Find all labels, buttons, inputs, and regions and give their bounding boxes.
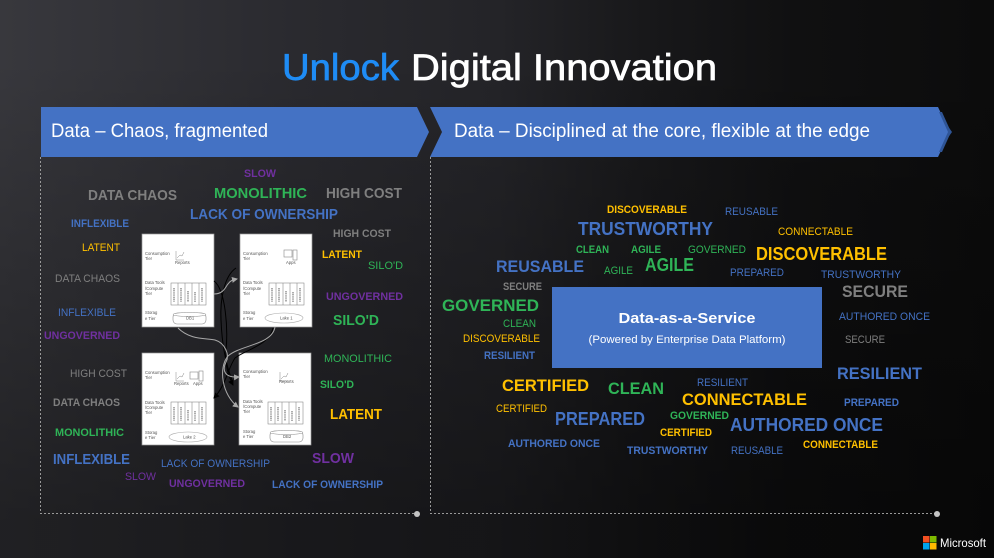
word cloud: disciplined attributes: REUSABLE [496, 257, 584, 276]
card: vertical D: DB2 [283, 434, 292, 439]
word cloud: disciplined attributes: PREPARED [730, 267, 784, 279]
card: vertical B: e Tier [243, 316, 254, 321]
word cloud: disciplined attributes: AUTHORED ONCE [508, 438, 600, 450]
word cloud: chaos attributes: MONOLITHIC [55, 427, 124, 439]
card: vertical A: Tier [145, 291, 153, 296]
word cloud: chaos attributes: INFLEXIBLE [53, 451, 130, 468]
word cloud: chaos attributes: INFLEXIBLE [71, 218, 129, 230]
word cloud: disciplined attributes: TRUSTWORTHY [627, 445, 709, 457]
arrow header: chaos [41, 107, 429, 157]
card: vertical B: Storag [243, 310, 256, 315]
card: vertical A: Tier [145, 256, 153, 261]
word cloud: disciplined attributes: AGILE [645, 255, 694, 275]
word cloud: chaos attributes: MONOLITHIC [324, 353, 392, 365]
word cloud: disciplined attributes: CONNECTABLE [778, 226, 853, 238]
card: vertical D: Reports [279, 379, 294, 384]
word cloud: chaos attributes: LATENT [322, 249, 362, 261]
card: vertical D: Tier [243, 374, 251, 379]
word cloud: disciplined attributes: CERTIFIED [496, 403, 547, 415]
word cloud: chaos attributes: SILO'D [333, 312, 379, 329]
card: vertical C [142, 353, 214, 445]
word cloud: disciplined attributes: SECURE [503, 281, 542, 293]
card: vertical D: Consumption [243, 369, 268, 374]
center box: Data-as-a-Service [552, 287, 822, 368]
card: vertical D: Tier [243, 409, 251, 414]
card: vertical D: Data Tools [243, 399, 263, 404]
card: vertical A: Storag [145, 310, 158, 315]
word cloud: disciplined attributes: AUTHORED ONCE [839, 311, 930, 323]
word cloud: chaos attributes: LACK OF OWNERSHIP [272, 479, 383, 491]
card: vertical C: Consumption [145, 370, 170, 375]
panel: chaos frame [40, 157, 420, 517]
center box: Data-as-a-Service: Data-as-a-Service [618, 310, 756, 327]
word cloud: disciplined attributes: SECURE [845, 334, 885, 346]
card: vertical B: /Compute [243, 286, 262, 291]
word cloud: disciplined attributes: GOVERNED [670, 410, 729, 422]
card: vertical C: Data Tools [145, 400, 165, 405]
word cloud: chaos attributes: LACK OF OWNERSHIP [190, 206, 338, 223]
card: vertical A: e Tier [145, 316, 156, 321]
word cloud: disciplined attributes: AUTHORED ONCE [730, 415, 883, 435]
card: vertical B: Lake 1 [280, 316, 293, 320]
word cloud: disciplined attributes: CONNECTABLE [682, 390, 807, 409]
word cloud: disciplined attributes: RESILIENT [484, 350, 535, 362]
card: vertical D: e Tier [243, 434, 254, 439]
word cloud: disciplined attributes: CLEAN [608, 379, 664, 398]
word cloud: disciplined attributes: RESILIENT [697, 377, 748, 389]
card: vertical B: Apps [286, 260, 296, 265]
card: vertical C: Storag [145, 430, 158, 435]
word cloud: disciplined attributes: CLEAN [503, 318, 536, 330]
card: vertical B: Consumption [243, 251, 268, 256]
word cloud: disciplined attributes: REUSABLE [731, 445, 783, 457]
card: vertical B: Data Tools [243, 280, 263, 285]
word cloud: disciplined attributes: CERTIFIED [502, 376, 589, 395]
card: vertical C: Lake 2 [183, 434, 196, 440]
word cloud: disciplined attributes: DISCOVERABLE [607, 204, 687, 216]
card: vertical D: Storag [243, 429, 256, 434]
word cloud: chaos attributes: SLOW [125, 471, 157, 483]
word cloud: chaos attributes: SLOW [244, 168, 277, 180]
word cloud: disciplined attributes: SECURE [842, 282, 908, 301]
arrow header: chaos: Data – Chaos, fragmented [51, 121, 268, 142]
word cloud: disciplined attributes: GOVERNED [688, 244, 746, 256]
word cloud: chaos attributes: DATA CHAOS [55, 273, 120, 285]
word cloud: chaos attributes: SILO'D [320, 379, 354, 391]
word cloud: disciplined attributes: CLEAN [576, 244, 609, 256]
card: vertical A: DB1 [186, 316, 195, 320]
word cloud: disciplined attributes: DISCOVERABLE [756, 244, 887, 264]
card: vertical C: /Compute [145, 405, 164, 410]
word cloud: disciplined attributes: TRUSTWORTHY [821, 269, 902, 281]
word cloud: disciplined attributes [442, 204, 930, 457]
card: vertical A: Reports [175, 260, 190, 265]
word cloud: disciplined attributes: CERTIFIED [660, 427, 712, 439]
word cloud: chaos attributes: UNGOVERNED [169, 478, 245, 490]
word cloud: disciplined attributes: CONNECTABLE [803, 439, 878, 451]
card: vertical B: Tier [243, 291, 251, 296]
word cloud: chaos attributes: SLOW [312, 450, 355, 467]
word cloud: chaos attributes: SILO'D [368, 260, 403, 272]
word cloud: chaos attributes: HIGH COST [70, 368, 127, 380]
word cloud: chaos attributes: INFLEXIBLE [58, 307, 116, 319]
word cloud: chaos attributes: LATENT [330, 406, 382, 423]
title: Digital Innovation [411, 47, 717, 88]
word cloud: disciplined attributes: AGILE [604, 265, 633, 277]
word cloud: disciplined attributes: DISCOVERABLE [463, 333, 540, 345]
word cloud: chaos attributes: LACK OF OWNERSHIP [161, 458, 270, 470]
Microsoft logo: Microsoft [940, 536, 987, 550]
card: vertical B [240, 234, 312, 327]
word cloud: disciplined attributes: TRUSTWORTHY [578, 219, 713, 239]
card: vertical B: Tier [243, 256, 251, 261]
arrow header: disciplined [430, 107, 952, 157]
center box: Data-as-a-Service: (Powered by Enterprise Data Platform) [588, 334, 786, 346]
word cloud: disciplined attributes: PREPARED [555, 409, 645, 429]
data flow arrows [178, 268, 275, 407]
card: vertical C: Tier [145, 410, 153, 415]
word cloud: chaos attributes: UNGOVERNED [44, 330, 120, 342]
word cloud: disciplined attributes: GOVERNED [442, 296, 539, 315]
card: vertical C: Tier [145, 375, 153, 380]
word cloud: disciplined attributes: PREPARED [844, 397, 899, 409]
word cloud: chaos attributes: UNGOVERNED [326, 291, 403, 303]
word cloud: chaos attributes: DATA CHAOS [88, 187, 177, 204]
word cloud: chaos attributes: LATENT [82, 242, 120, 254]
word cloud: chaos attributes [44, 168, 403, 491]
card: vertical C: Apps [193, 381, 203, 386]
word cloud: chaos attributes: HIGH COST [333, 228, 391, 240]
word cloud: chaos attributes: MONOLITHIC [214, 185, 307, 202]
panel: disciplined frame [430, 157, 940, 517]
word cloud: disciplined attributes: REUSABLE [725, 206, 778, 218]
card: vertical A: Consumption [145, 251, 170, 256]
word cloud: chaos attributes: DATA CHAOS [53, 397, 120, 409]
card: vertical A: Data Tools [145, 280, 165, 285]
arrow header: disciplined: Data – Disciplined at the core, flexible at the edge [454, 121, 870, 142]
word cloud: chaos attributes: HIGH COST [326, 185, 402, 202]
word cloud: disciplined attributes: RESILIENT [837, 364, 923, 383]
card: vertical D: /Compute [243, 404, 262, 409]
architecture diagram: fragmented verticals [142, 234, 312, 445]
title [282, 47, 717, 88]
word cloud: disciplined attributes: AGILE [631, 244, 661, 256]
card: vertical A [142, 234, 214, 327]
card: vertical C: Reports [174, 381, 189, 386]
card: vertical A: /Compute [145, 286, 164, 291]
card: vertical D [239, 353, 311, 445]
title: Unlock [282, 47, 400, 88]
card: vertical C: e Tier [145, 435, 156, 440]
